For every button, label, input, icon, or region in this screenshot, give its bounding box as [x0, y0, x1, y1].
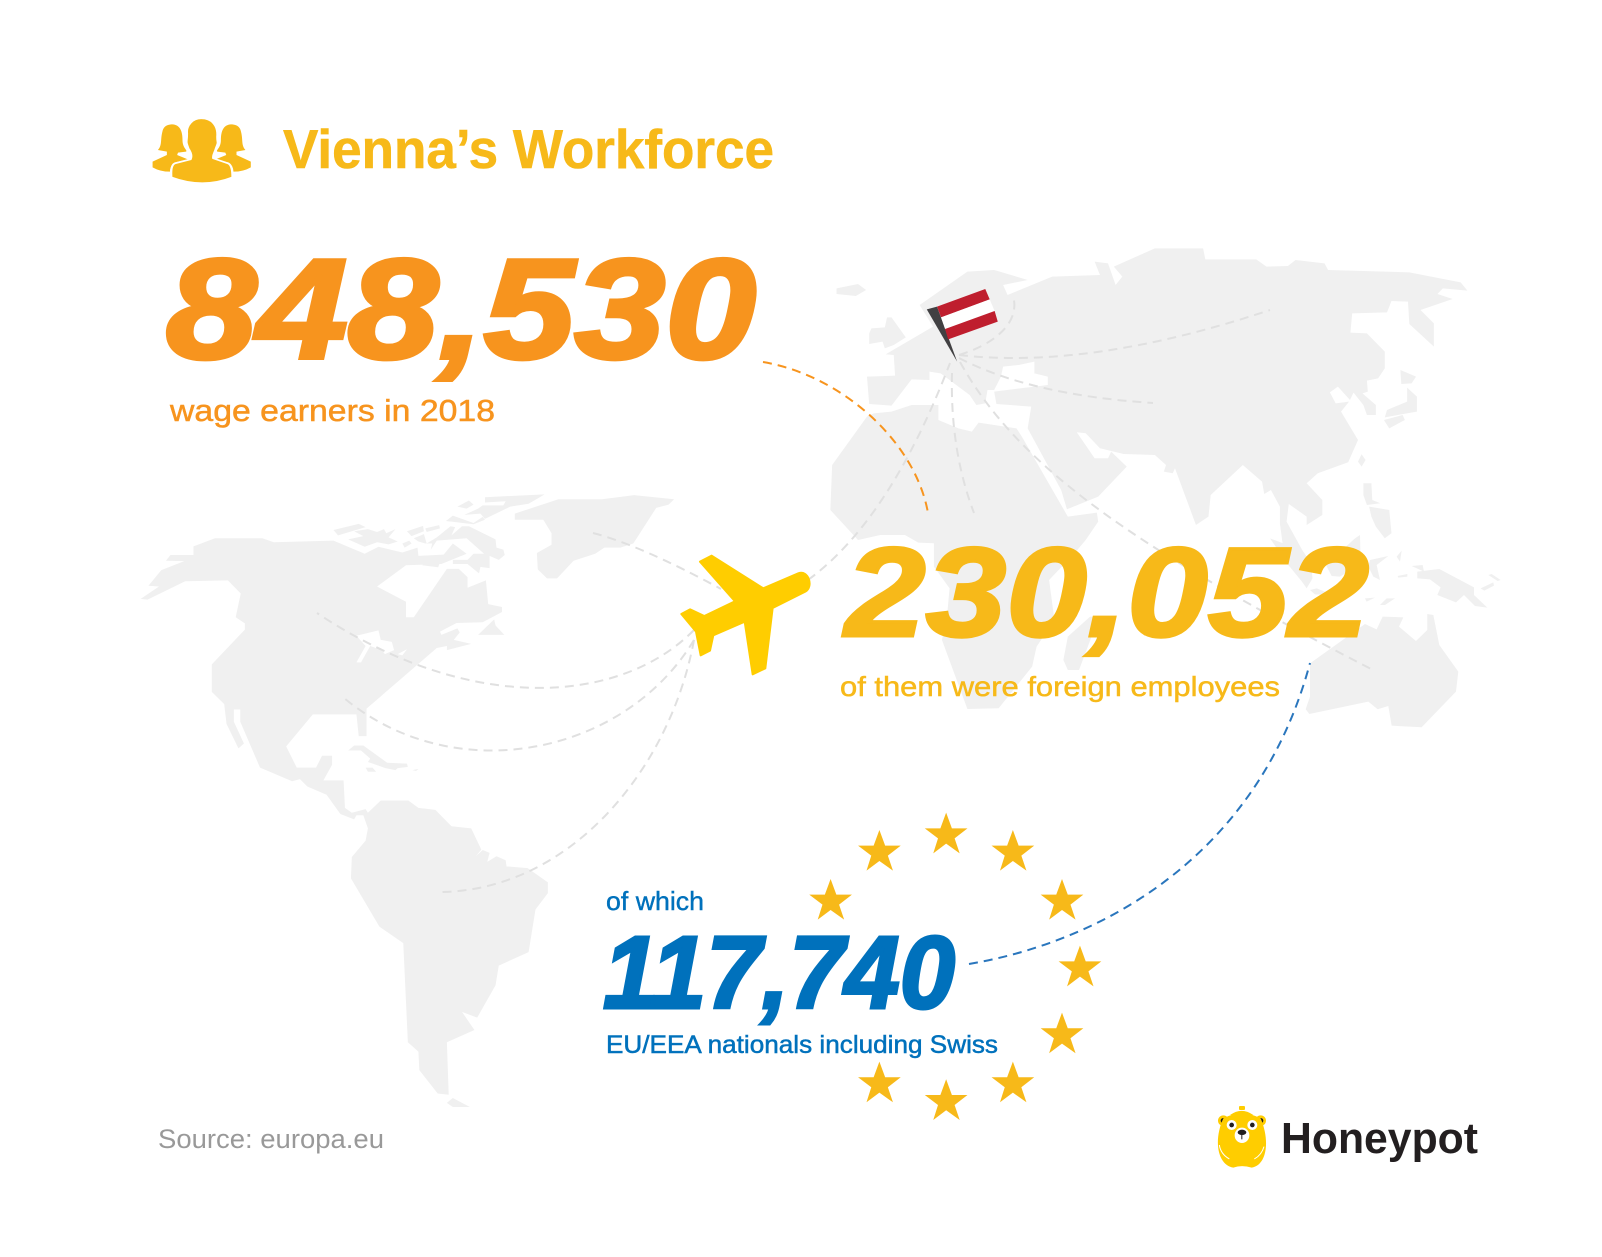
label: foreign employees: of them were foreign employees — [840, 671, 1280, 702]
source: Source: europa.eu — [158, 1124, 384, 1154]
icon: plane — [681, 556, 810, 674]
icon: bear — [1218, 1106, 1266, 1168]
icon: EU stars — [809, 813, 1101, 1120]
stat: 230,052: 230,052 — [843, 521, 1369, 663]
stat: 848,530: 848,530 — [166, 230, 756, 389]
dashed line: orange — [763, 362, 928, 513]
map: Eurasia and Africa — [830, 248, 1467, 709]
world map — [141, 248, 1501, 1107]
label: EU/EEA nationals: EU/EEA nationals including Swiss — [606, 1031, 998, 1059]
flight routes — [317, 300, 1373, 892]
icon: Austrian flag pin — [927, 289, 998, 362]
wordmark: Honeypot — [1281, 1114, 1478, 1163]
logo: Honeypot — [1218, 1106, 1478, 1168]
map: Australia and Indonesia — [1270, 535, 1501, 727]
stat: 117,740: 117,740 — [603, 915, 955, 1030]
title: Vienna’s Workforce — [283, 118, 774, 180]
map: Americas and Greenland — [141, 494, 674, 1107]
icon: people — [153, 118, 251, 183]
dashed line: blue — [969, 663, 1310, 964]
label: wage earners: wage earners in 2018 — [169, 393, 495, 428]
label: of which: of which — [606, 886, 704, 916]
